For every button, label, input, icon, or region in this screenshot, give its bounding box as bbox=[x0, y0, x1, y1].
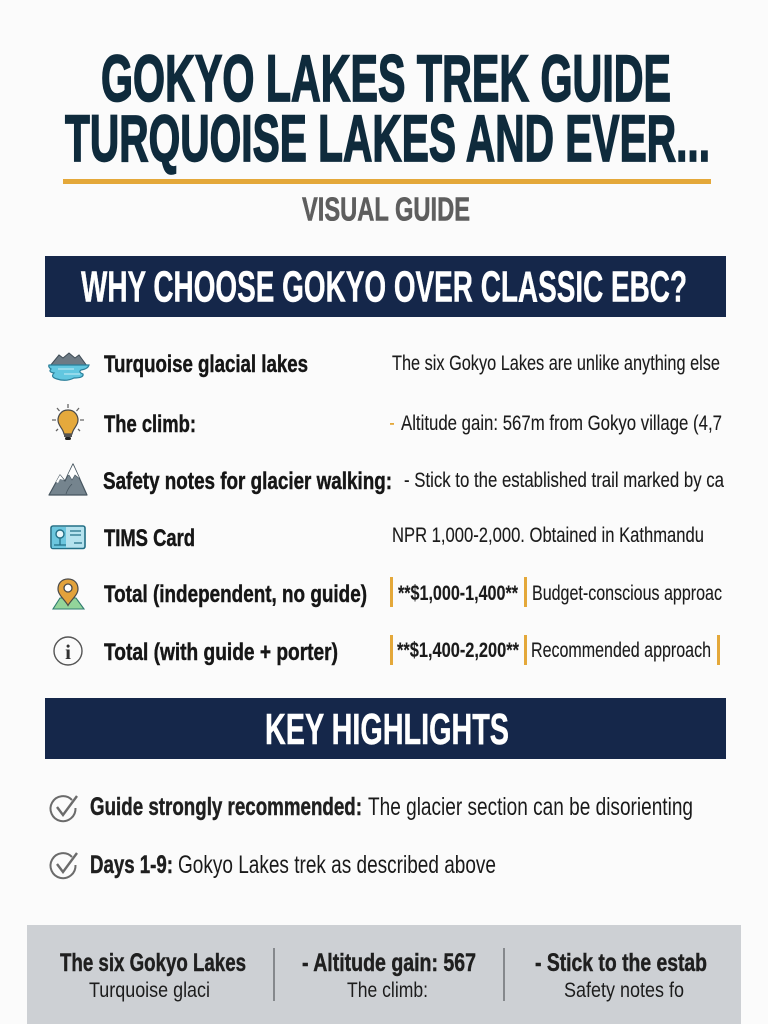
stat: altitude gain: - Altitude gain: 567 bbox=[302, 949, 476, 977]
row: total independent bbox=[53, 577, 722, 609]
row: total independent: **$1,000-1,400** bbox=[398, 582, 519, 605]
row: the climb bbox=[52, 404, 722, 440]
subtitle: VISUAL GUIDE bbox=[302, 190, 470, 228]
highlight: days 1-9: Gokyo Lakes trek as described above bbox=[178, 851, 496, 879]
row: turquoise glacial lakes bbox=[49, 351, 720, 380]
icon: check mark bbox=[51, 796, 77, 821]
orange dash bbox=[390, 423, 394, 425]
stat: six Gokyo lakes bbox=[60, 949, 246, 1002]
stat: altitude gain bbox=[302, 949, 476, 1002]
row: total independent: Total (independent, no guide) bbox=[104, 581, 367, 608]
highlight: days 1-9: Days 1-9: bbox=[90, 851, 173, 879]
title bbox=[65, 41, 710, 175]
icon: information circle bbox=[54, 637, 82, 665]
icon: check mark bbox=[51, 853, 77, 878]
icon: mountains and lake bbox=[49, 353, 89, 380]
row: total with guide: **$1,400-2,200** bbox=[397, 639, 520, 662]
stat: stick to the trail: Safety notes fo bbox=[564, 979, 684, 1002]
row: turquoise glacial lakes: Turquoise glacial lakes bbox=[104, 351, 308, 378]
section banner: key highlights: KEY HIGHLIGHTS bbox=[265, 705, 509, 754]
stat: stick to the trail: - Stick to the estab bbox=[535, 949, 707, 977]
highlight: guide recommended bbox=[51, 793, 693, 821]
row: total with guide bbox=[54, 635, 720, 666]
icon: snowy mountains bbox=[49, 464, 87, 495]
icon: ID card bbox=[51, 526, 85, 548]
row: safety notes: Safety notes for glacier walking: bbox=[103, 468, 392, 495]
highlight: days 1-9 bbox=[51, 851, 496, 879]
comparison rows bbox=[49, 351, 724, 666]
section banner: key highlights bbox=[45, 698, 726, 759]
stat: altitude gain: The climb: bbox=[347, 979, 428, 1002]
footer stats panel bbox=[27, 925, 741, 1024]
row: safety notes bbox=[49, 464, 724, 495]
stat: six Gokyo lakes: Turquoise glaci bbox=[89, 979, 210, 1002]
stat: six Gokyo lakes: The six Gokyo Lakes bbox=[60, 949, 246, 977]
row: total with guide: Recommended approach bbox=[531, 639, 711, 662]
row: total with guide: Total (with guide + porter) bbox=[104, 639, 338, 666]
icon: information circle: i bbox=[65, 640, 71, 664]
highlight: guide recommended: Guide strongly recommended: bbox=[90, 793, 362, 821]
row: TIMS card bbox=[51, 524, 704, 552]
row: TIMS card: TIMS Card bbox=[104, 525, 195, 552]
row: the climb: The climb: bbox=[104, 411, 196, 438]
icon: map pin bbox=[53, 579, 84, 609]
icon: light bulb bbox=[52, 404, 84, 440]
stat: stick to the trail bbox=[535, 949, 707, 1002]
title underline bbox=[63, 179, 711, 184]
